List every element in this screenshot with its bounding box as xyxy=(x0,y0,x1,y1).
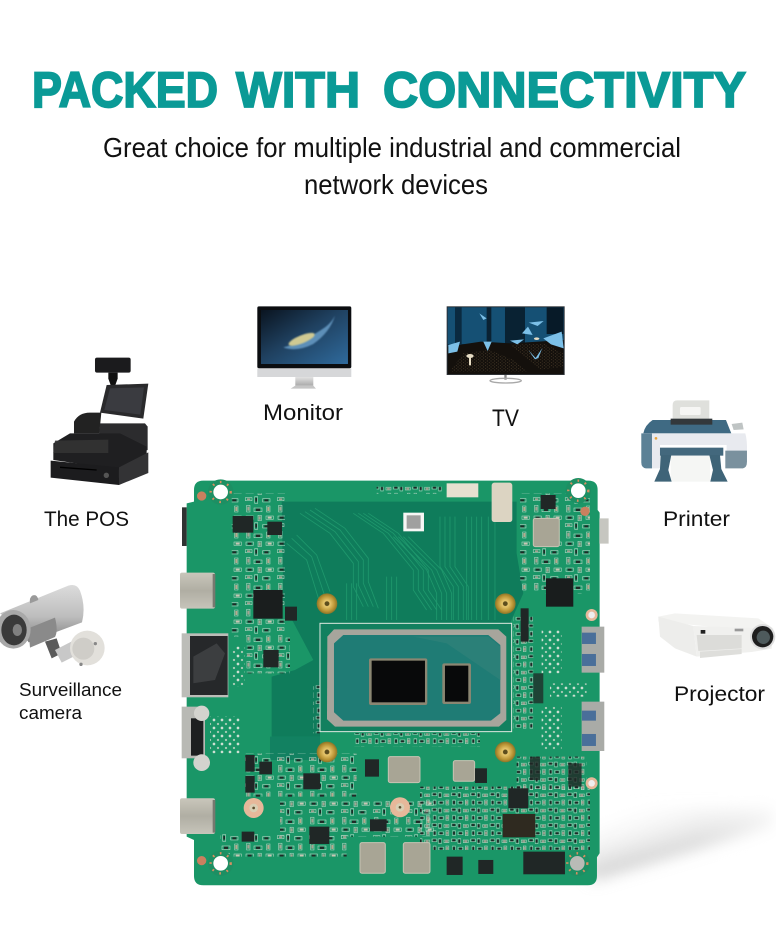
icon: printer xyxy=(641,400,747,482)
copper pads xyxy=(197,491,598,865)
routed traces xyxy=(287,508,495,620)
port: left USB-C bottom xyxy=(180,798,215,834)
title: CONNECTIVITY xyxy=(383,62,746,118)
PCB base xyxy=(187,481,600,885)
motherboard xyxy=(180,478,609,885)
icon: TV xyxy=(447,306,565,383)
icon: POS terminal xyxy=(51,358,148,485)
icon: monitor xyxy=(257,306,351,389)
title xyxy=(32,62,746,118)
board shadow xyxy=(590,790,776,890)
label: Surveillance camera: Surveillance xyxy=(19,680,122,700)
icon: projector xyxy=(658,613,775,658)
port: micro slot xyxy=(182,507,187,546)
title: PACKED xyxy=(32,62,218,118)
icon: surveillance camera xyxy=(0,585,105,666)
dark trace area xyxy=(272,502,523,737)
port: RJ45 xyxy=(182,633,228,697)
label: TV: TV xyxy=(492,405,519,432)
subtitle: network devices xyxy=(304,169,488,200)
component fields xyxy=(210,487,590,857)
port: HDMI xyxy=(182,706,210,771)
subtitle xyxy=(103,132,681,200)
port: left USB-C top xyxy=(180,573,215,609)
label: The POS: The POS xyxy=(44,508,129,531)
subtitle: Great choice for multiple industrial and commercial xyxy=(103,132,681,163)
label: Surveillance camera: camera xyxy=(19,703,83,723)
inductors xyxy=(360,518,559,873)
label: Printer: Printer xyxy=(663,508,730,531)
title: WITH xyxy=(236,62,360,118)
port: right USB-A bottom xyxy=(582,702,604,751)
label: Surveillance camera xyxy=(19,680,122,723)
CPU xyxy=(320,623,512,732)
integrated circuits xyxy=(233,495,582,875)
label: Monitor: Monitor xyxy=(263,400,343,425)
port: right USB-A top xyxy=(582,627,604,673)
label: Projector: Projector xyxy=(674,683,765,706)
mounting standoffs xyxy=(317,593,516,762)
connectors top xyxy=(403,483,512,531)
port: audio jack xyxy=(599,518,609,544)
corner mounting holes xyxy=(208,478,591,876)
